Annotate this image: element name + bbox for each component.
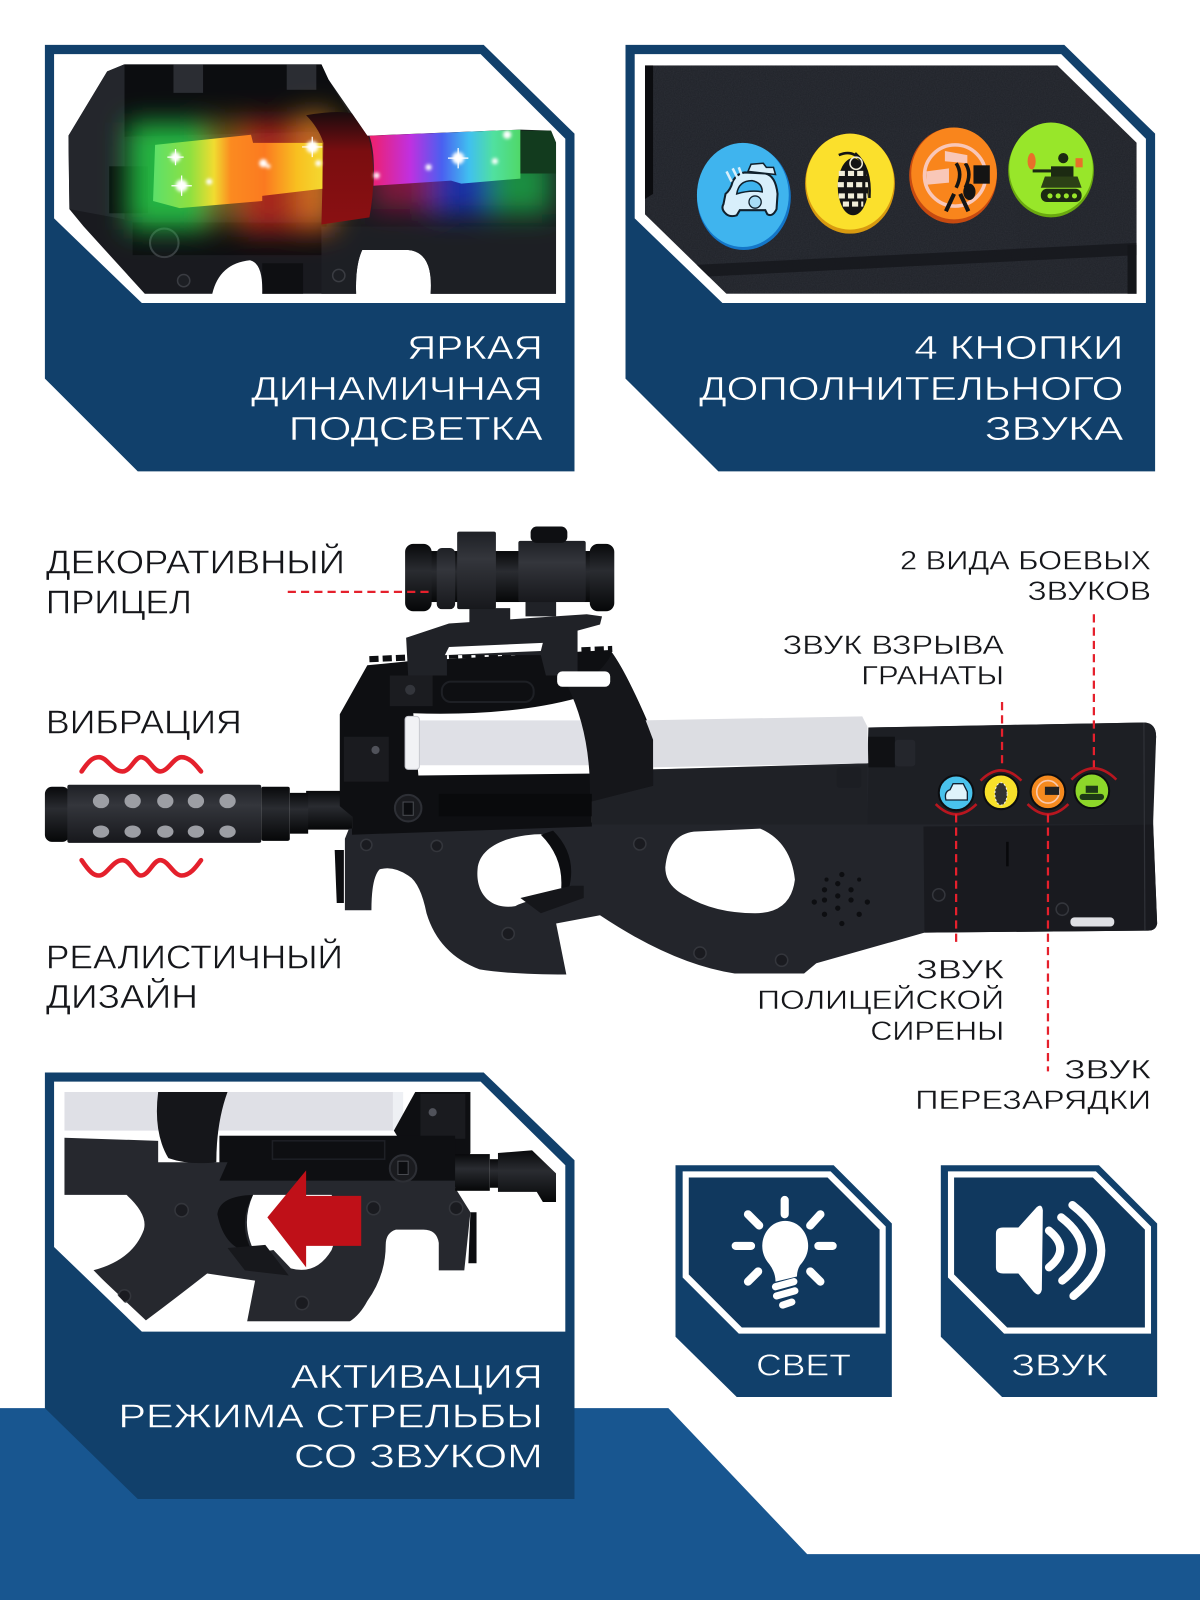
caption: ДИНАМИЧНАЯ bbox=[251, 371, 543, 408]
button: tank bbox=[1008, 122, 1094, 217]
lower frame bbox=[64, 1138, 470, 1322]
label: realistic design bbox=[46, 938, 343, 1016]
caption bbox=[699, 330, 1124, 448]
icon: vibration waves bbox=[82, 757, 201, 876]
lower frame and stock bbox=[345, 722, 1157, 974]
label: realistic design: ДИЗАЙН bbox=[46, 978, 198, 1016]
label: two battle sounds: 2 ВИДА БОЕВЫХ bbox=[900, 545, 1151, 575]
barrel bbox=[455, 1154, 490, 1191]
caption: РЕЖИМА СТРЕЛЬБЫ bbox=[118, 1399, 543, 1436]
label: reload sound bbox=[915, 1055, 1152, 1115]
callouts: sound buttons bbox=[936, 614, 1116, 1071]
panel: four extra-sound buttons bbox=[626, 45, 1155, 471]
label: grenade sound bbox=[783, 630, 1004, 691]
caption: ДОПОЛНИТЕЛЬНОГО bbox=[699, 371, 1123, 408]
label: reload sound: ПЕРЕЗАРЯДКИ bbox=[915, 1085, 1151, 1115]
label: vibration: ВИБРАЦИЯ bbox=[46, 705, 242, 742]
label: realistic design: РЕАЛИСТИЧНЫЙ bbox=[46, 938, 343, 976]
caption: ПОДСВЕТКА bbox=[289, 411, 544, 448]
label: decorative sight: ПРИЦЕЛ bbox=[46, 584, 192, 621]
caption: ЯРКАЯ bbox=[407, 330, 543, 367]
receiver bbox=[219, 1136, 455, 1183]
icon: light bulb bbox=[736, 1200, 833, 1305]
stock buttons bbox=[939, 773, 1109, 810]
label: reload sound: ЗВУК bbox=[1064, 1055, 1152, 1085]
panel: firing mode activation bbox=[45, 1072, 574, 1499]
trigger opening bbox=[247, 1195, 337, 1270]
callout: sight leader bbox=[288, 591, 429, 593]
upper receiver bbox=[340, 650, 653, 835]
label: police siren: ЗВУК bbox=[916, 955, 1005, 985]
button: police car bbox=[697, 143, 791, 250]
caption bbox=[118, 1359, 543, 1475]
suppressor bbox=[45, 785, 308, 843]
badge: light bbox=[676, 1165, 892, 1397]
panel: bright dynamic backlight bbox=[45, 45, 574, 471]
label: grenade sound: ГРАНАТЫ bbox=[861, 661, 1004, 691]
label: police siren: ПОЛИЦЕЙСКОЙ bbox=[757, 985, 1004, 1015]
illustration: toy gun bbox=[45, 527, 1157, 974]
scope bbox=[405, 527, 614, 622]
label: two battle sounds bbox=[900, 545, 1151, 606]
caption: АКТИВАЦИЯ bbox=[291, 1359, 543, 1396]
photo: glowing magazine bbox=[61, 61, 561, 298]
button: reload target bbox=[909, 128, 997, 223]
trigger loop bbox=[477, 834, 567, 907]
photo: coloured buttons bbox=[645, 65, 1137, 294]
caption: СО ЗВУКОМ bbox=[294, 1438, 543, 1475]
magazine strap bbox=[157, 1092, 228, 1163]
photo: trigger close-up bbox=[64, 1092, 556, 1322]
badge: sound bbox=[941, 1165, 1157, 1397]
arrow: red trigger arrow bbox=[267, 1170, 361, 1267]
caption: СВЕТ bbox=[756, 1349, 851, 1383]
caption: ЗВУКА bbox=[985, 411, 1124, 448]
icon: speaker bbox=[996, 1205, 1101, 1296]
label: grenade sound: ЗВУК ВЗРЫВА bbox=[783, 630, 1004, 660]
label: decorative sight: ДЕКОРАТИВНЫЙ bbox=[46, 543, 345, 581]
label: two battle sounds: ЗВУКОВ bbox=[1028, 576, 1151, 606]
caption: 4 КНОПКИ bbox=[914, 330, 1123, 367]
thumbhole bbox=[665, 829, 795, 913]
label: decorative sight bbox=[46, 543, 345, 621]
bottom background band bbox=[0, 1408, 1200, 1600]
label: police siren bbox=[757, 955, 1005, 1046]
button: grenade bbox=[805, 134, 895, 234]
caption bbox=[251, 330, 544, 448]
caption: ЗВУК bbox=[1011, 1349, 1108, 1383]
label: police siren: СИРЕНЫ bbox=[870, 1016, 1004, 1046]
